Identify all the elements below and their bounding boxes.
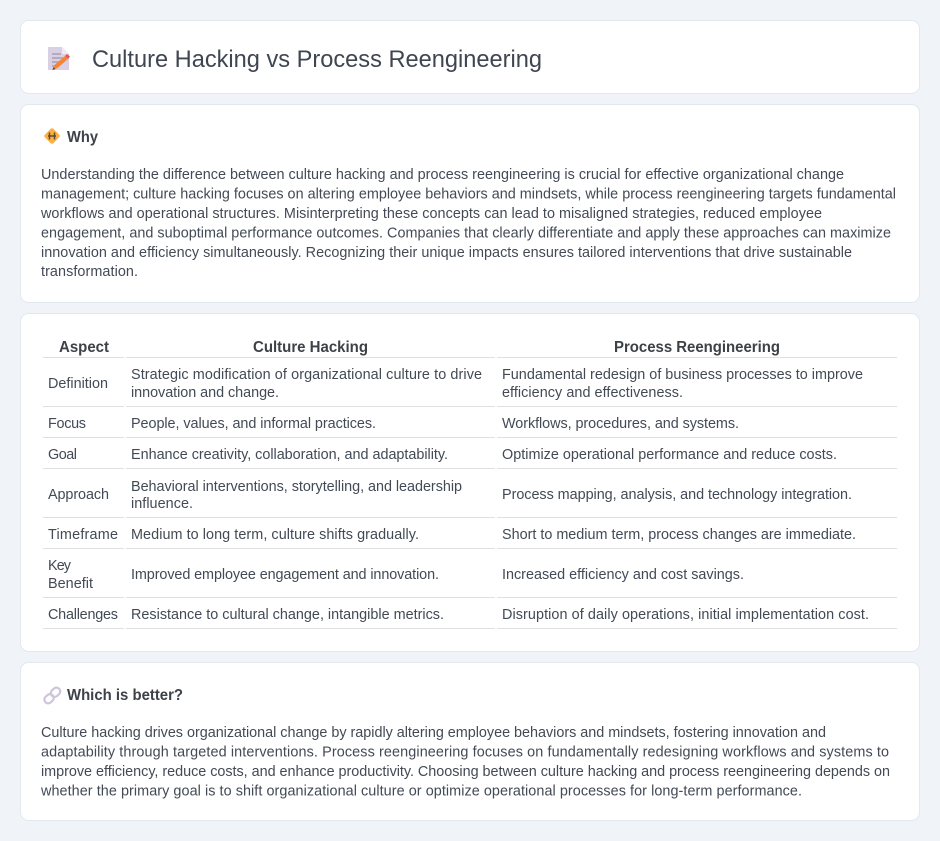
text block: why: innovation and efficiency simultaneously. Recognizing their unique impacts ensures tailored interventions that drive sustainable bbox=[41, 245, 852, 261]
row: focus: Workflows, procedures, and systems. bbox=[502, 416, 739, 432]
row: timeframe bbox=[48, 527, 856, 543]
row: definition: Fundamental redesign of business processes to improve bbox=[502, 367, 863, 383]
row: challenges bbox=[48, 607, 869, 623]
row: key benefit: Improved employee engagement and innovation. bbox=[131, 567, 439, 583]
row: focus: Focus bbox=[48, 416, 86, 432]
text block: why: workflows and operational structures. Misinterpreting these concepts can lead to misaligned strategies, reduced employee bbox=[40, 206, 822, 222]
table header: Culture Hacking bbox=[253, 339, 368, 356]
panel: why bbox=[20, 104, 920, 302]
row: focus bbox=[48, 416, 739, 432]
row: approach: Approach bbox=[48, 487, 109, 503]
text block: which is better: Culture hacking drives organizational change by rapidly altering employee behaviors and mindsets, fostering innovation and bbox=[41, 725, 826, 741]
row: goal: Optimize operational performance and reduce costs. bbox=[502, 447, 837, 463]
row: focus: People, values, and informal practices. bbox=[131, 416, 376, 432]
table header: Process Reengineering bbox=[614, 339, 780, 356]
panel: comparison table bbox=[20, 314, 920, 652]
row: definition bbox=[48, 367, 863, 401]
row: definition: efficiency and effectiveness. bbox=[502, 385, 683, 401]
row: definition: Strategic modification of organizational culture to drive bbox=[131, 367, 482, 383]
row: timeframe: Timeframe bbox=[48, 527, 118, 543]
row: goal bbox=[48, 447, 837, 463]
icon: link bbox=[43, 686, 62, 705]
text block: why: management; culture hacking focuses on altering employee behaviors and mindsets, while process reengineering targets fundamental bbox=[41, 186, 896, 202]
text block: which is better bbox=[40, 725, 890, 800]
icon: document with pencil bbox=[48, 47, 70, 70]
row: key benefit: Key bbox=[48, 558, 72, 574]
panel: header bbox=[20, 20, 920, 94]
row: approach: Process mapping, analysis, and technology integration. bbox=[502, 487, 852, 503]
text block: why: transformation. bbox=[41, 264, 138, 280]
text block: why: Understanding the difference between culture hacking and process reengineering is crucial for effective organizational change bbox=[41, 167, 844, 183]
title: Culture Hacking vs Process Reengineering bbox=[92, 46, 542, 73]
row: approach bbox=[48, 479, 852, 512]
row: timeframe: Medium to long term, culture shifts gradually. bbox=[131, 527, 419, 543]
row: key benefit bbox=[48, 558, 744, 592]
text block: why bbox=[40, 167, 896, 280]
table header bbox=[59, 339, 780, 356]
row: challenges: Challenges bbox=[48, 607, 118, 623]
icon: warning diamond bbox=[44, 128, 60, 144]
row: timeframe: Short to medium term, process changes are immediate. bbox=[502, 527, 856, 543]
row: definition: Definition bbox=[48, 376, 108, 392]
table header: Aspect bbox=[59, 339, 110, 356]
row: definition: innovation and change. bbox=[131, 385, 279, 401]
text block: why: engagement, and suboptimal performance outcomes. Companies that clearly differentiate and apply these approaches can maximize bbox=[41, 226, 891, 242]
text block: which is better: adaptability through targeted interventions. Process reengineering focuses on fundamentally redesigning workflows and systems to bbox=[41, 744, 889, 760]
row: key benefit: Benefit bbox=[48, 576, 93, 592]
row: goal: Goal bbox=[48, 447, 77, 463]
panel: which is better bbox=[20, 662, 920, 820]
row: key benefit: Increased efficiency and cost savings. bbox=[502, 567, 744, 583]
heading: why: Why bbox=[67, 129, 98, 146]
row: challenges: Disruption of daily operations, initial implementation cost. bbox=[502, 607, 869, 623]
row: approach: influence. bbox=[131, 496, 193, 512]
heading: which is better: Which is better? bbox=[67, 687, 183, 704]
row: approach: Behavioral interventions, storytelling, and leadership bbox=[131, 479, 462, 495]
text block: which is better: whether the primary goal is to shift organizational culture or optimize operational processes for long-term performance. bbox=[40, 784, 802, 800]
row: goal: Enhance creativity, collaboration, and adaptability. bbox=[131, 447, 448, 463]
row: challenges: Resistance to cultural change, intangible metrics. bbox=[131, 607, 444, 623]
text block: which is better: improve efficiency, reduce costs, and enhance productivity. Choosing between culture hacking and process reengineering depends on bbox=[41, 764, 890, 780]
